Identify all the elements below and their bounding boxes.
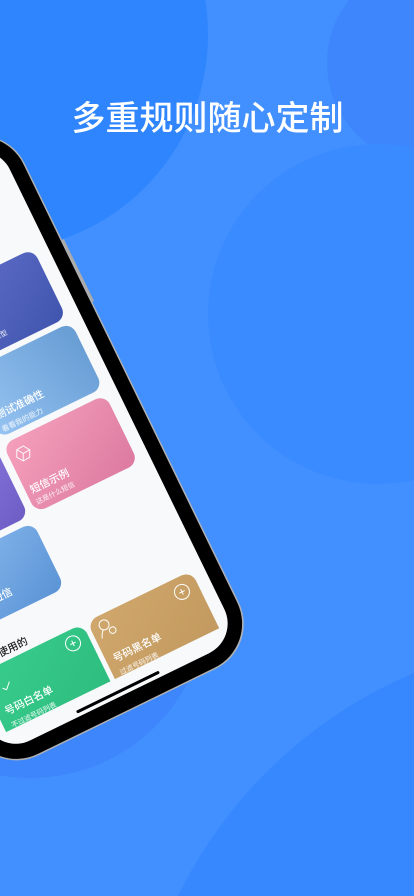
phone screen (0, 140, 239, 755)
side button (61, 239, 94, 302)
card title: 号码黑名单 (111, 630, 164, 665)
card: blacklist (90, 574, 220, 679)
card subtitle: 这是什么短信 (34, 480, 76, 506)
background circle: bottom right (178, 673, 414, 896)
background circle: top right (327, 0, 414, 164)
clipped bottom cards (0, 574, 220, 732)
icon: person block (98, 619, 116, 639)
card: sms example (3, 395, 139, 513)
phone mockup (0, 140, 244, 760)
background circle: middle right (208, 144, 414, 484)
card: purple (0, 448, 29, 566)
icon: plus (65, 635, 81, 652)
card subtitle: 看看我的能力 (0, 405, 45, 434)
phone body (0, 120, 259, 775)
icon: person check (2, 682, 10, 690)
icon: cube (17, 446, 30, 461)
home indicator (76, 671, 160, 714)
card subtitle: 不过滤号码列表 (10, 700, 58, 730)
card title: 短信示例 (28, 466, 71, 496)
background circle: bottom left (0, 422, 208, 778)
background circle: top left (0, 0, 208, 251)
phone rim (0, 119, 261, 777)
icon: plus (174, 584, 190, 600)
card subtitle: 过滤号码列表 (118, 650, 160, 677)
title: 多重规则随心定制 (72, 100, 344, 138)
card: accuracy test (0, 322, 103, 438)
card title: 号码白名单 (2, 683, 55, 718)
card: message type (0, 249, 67, 367)
card: messages (0, 522, 65, 638)
card: whitelist (0, 628, 110, 732)
